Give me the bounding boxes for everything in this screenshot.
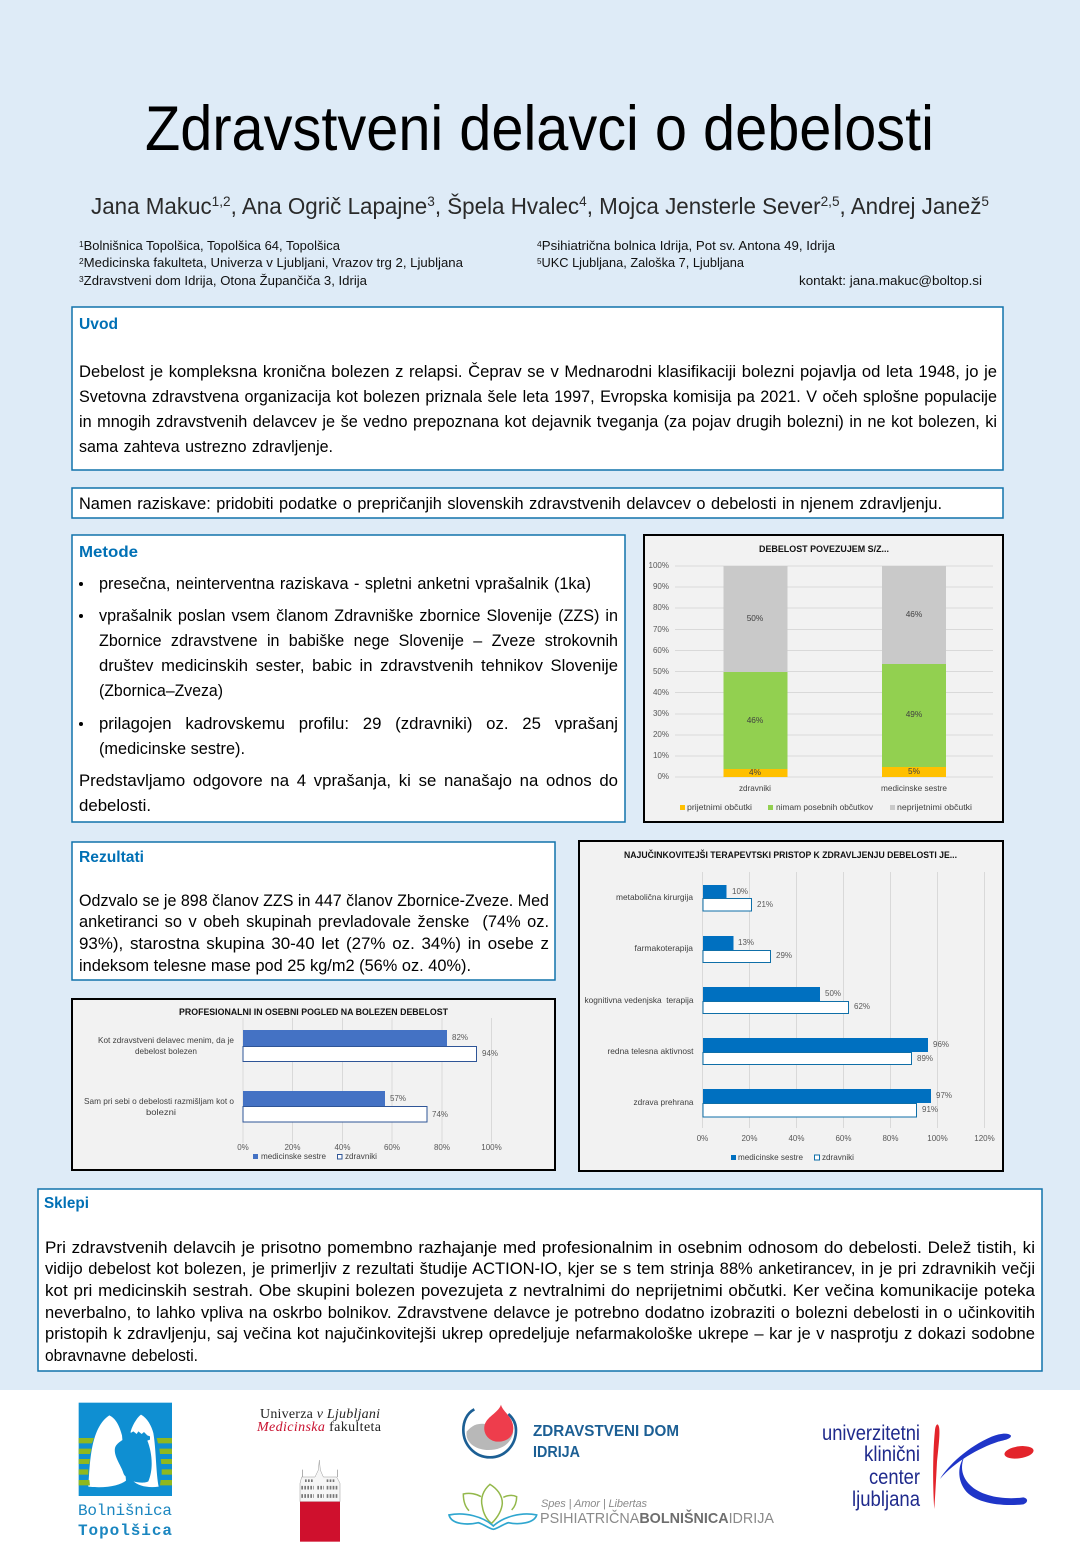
axis labels: 80% <box>882 1134 899 1143</box>
panel: Sklepi <box>38 1189 1042 1371</box>
logo: UKC Ljubljana: klinični <box>864 1443 920 1466</box>
axis labels: 120% <box>974 1134 995 1143</box>
text: Rezultati body: anketiranci so v obeh skupinah prevladovale ženske (74% oz. <box>79 913 549 931</box>
logo: Psihiatrična bolnišnica Idrija: Spes | Amor | Libertas <box>541 1498 648 1510</box>
bars: Kot zdravstveni delavec: 94% <box>482 1049 498 1058</box>
bars: farmakoterapija: farmakoterapija <box>634 943 693 953</box>
bars: metabolična kirurgija: metabolična kirurgija <box>616 892 693 902</box>
stacked bar: zdravniki: 4% <box>749 767 762 777</box>
bars: redna telesna aktivnost <box>608 1038 949 1064</box>
bars: Kot zdravstveni delavec: debelost bolezen <box>135 1046 197 1056</box>
text: Sklepi body: neverbalno, to lahko vpliva na oskrbo bolnikov. Zdravstvene delavce je potrebno dodatno izobraziti o bolezni debelosti in o učinkovitih <box>45 1304 1035 1322</box>
legend <box>680 802 972 812</box>
text: Sklepi body: pristopih k zdravljenju, saj večina kot najučinkovitejši ukrep opredeljuje nefarmakološke ukrepe – kar je v nasprotju z dokazi sodobne <box>45 1325 1035 1343</box>
logo: Zdravstveni dom Idrija: ZDRAVSTVENI DOM <box>533 1423 679 1440</box>
bars: redna telesna aktivnost: 89% <box>917 1054 933 1063</box>
affiliations: 2 <box>79 257 84 266</box>
axis labels: 0% <box>237 1143 249 1152</box>
axis labels: percent <box>649 561 669 781</box>
bars: Sam pri sebi: 74% <box>432 1110 448 1119</box>
axis labels: percent: 0% <box>657 772 669 781</box>
logo: Psihiatrična bolnišnica Idrija <box>449 1484 774 1529</box>
chart: Profesionalni in osebni pogled: PROFESIONALNI IN OSEBNI POGLED NA BOLEZEN DEBELOST <box>179 1007 448 1018</box>
axis labels: percent: 20% <box>653 730 669 739</box>
chart: Najučinkovitejši terapevtski pristop <box>579 841 1003 1171</box>
authors: 3 <box>427 193 435 209</box>
title: Zdravstveni delavci o debelosti <box>145 94 934 164</box>
affiliations: 1 <box>79 240 84 249</box>
bars: zdrava prehrana: zdrava prehrana <box>634 1097 694 1107</box>
bars: redna telesna aktivnost: redna telesna aktivnost <box>608 1046 694 1056</box>
bars: kognitivna vedenjska terapija: 62% <box>854 1002 870 1011</box>
axis labels: percent: 50% <box>653 667 669 676</box>
logo: Bolnišnica Topolšica: Topolšica <box>78 1522 172 1540</box>
legend: prijetnimi občutki <box>687 802 752 812</box>
heading: Rezultati: Rezultati <box>79 849 144 866</box>
logo: UKC Ljubljana: univerzitetni <box>822 1422 920 1445</box>
text: Rezultati body: Odzvalo se je 898 članov ZZS in 447 članov Zbornice-Zveze. Med <box>79 892 549 910</box>
authors: 1,2 <box>212 193 231 209</box>
logo: Univerza v Ljubljani: Medicinska fakulteta <box>256 1420 382 1435</box>
text: Rezultati body: indeksom telesne mase pod 25 kg/m2 (56% oz. 40%). <box>79 957 471 975</box>
axis labels <box>237 1143 502 1152</box>
authors: , Špela Hvalec <box>435 192 579 219</box>
text: Uvod body: Debelost je kompleksna kronična bolezen z relapsi. Čeprav se v Mednarodni klasifikaciji bolezni pojavlja od leta 1948, jo je <box>79 362 997 381</box>
legend: neprijetnimi občutki <box>897 802 972 812</box>
authors: 5 <box>981 193 989 209</box>
legend: nimam posebnih občutkov <box>776 802 874 812</box>
axis labels: percent: 60% <box>653 646 669 655</box>
axis labels <box>697 1134 995 1143</box>
list: Metode bullets <box>79 575 618 815</box>
affiliations: Bolnišnica Topolšica, Topolšica 64, Topolšica <box>84 239 340 253</box>
chart: Debelost povezujem s/z <box>644 535 1003 822</box>
bars: redna telesna aktivnost: 96% <box>933 1040 949 1049</box>
text: Uvod body: Svetovna zdravstvena organizacija kot bolezen priznala šele leta 1997, Evropska komisija pa 2021. V očeh splošne populacije <box>79 388 997 406</box>
axis labels: 100% <box>927 1134 948 1143</box>
list: Metode bullets: (Zbornica–Zveza) <box>99 682 223 700</box>
axis labels: 20% <box>741 1134 758 1143</box>
legend <box>731 1152 854 1162</box>
logo: Bolnišnica Topolšica: Bolnišnica <box>78 1502 172 1520</box>
affiliations: 3 <box>79 275 84 284</box>
logo: Zdravstveni dom Idrija: IDRIJA <box>533 1444 580 1461</box>
panel: Metode <box>72 535 625 822</box>
logo: UKC Ljubljana <box>822 1422 1034 1511</box>
bars: Kot zdravstveni delavec: Kot zdravstveni delavec menim, da je <box>98 1035 234 1045</box>
legend <box>253 1151 377 1161</box>
list: Metode bullets: presečna, neinterventna raziskava - spletni anketni vprašalnik (1ka) <box>99 575 591 593</box>
list: Metode bullets: prilagojen kadrovskemu profilu: 29 (zdravniki) oz. 25 vprašanj <box>99 715 618 733</box>
axis labels: 60% <box>384 1143 400 1152</box>
text: Rezultati body <box>79 892 549 975</box>
bars: Kot zdravstveni delavec <box>98 1030 498 1062</box>
panel: Namen raziskave <box>72 488 1003 518</box>
affiliations: Psihiatrična bolnica Idrija, Pot sv. Antona 49, Idrija <box>542 239 835 253</box>
bars: metabolična kirurgija <box>616 885 773 911</box>
authors: 4 <box>579 193 587 209</box>
heading: Metode: Metode <box>79 544 138 561</box>
chart: Debelost povezujem s/z: zdravniki <box>739 783 771 793</box>
bars: kognitivna vedenjska terapija: 50% <box>825 989 841 998</box>
stacked bar: medicinske sestre: 49% <box>906 709 923 719</box>
list: Metode bullets: debelosti. <box>79 797 151 815</box>
heading: Uvod: Uvod <box>79 316 118 333</box>
bars: Sam pri sebi: Sam pri sebi o debelosti razmišljam kot o <box>84 1096 234 1106</box>
stacked bar: medicinske sestre: 46% <box>906 609 923 619</box>
axis labels: percent: 30% <box>653 709 669 718</box>
bars: Kot zdravstveni delavec: 82% <box>452 1033 468 1042</box>
list: Metode bullets: društev medicinskih sester, babic in zdravstvenih tehnikov Slovenije <box>99 657 618 675</box>
bars: Sam pri sebi <box>84 1091 448 1122</box>
axis labels: 20% <box>284 1143 301 1152</box>
text: Uvod body: sama zahteva ustrezno zdravljenje. <box>79 438 333 456</box>
logo: Zdravstveni dom Idrija <box>463 1405 679 1461</box>
text: Uvod body <box>79 362 997 456</box>
list: Metode bullets: vprašalnik poslan vsem članom Zdravniške zbornice Slovenije (ZZS) in <box>99 607 618 625</box>
text: Sklepi body: vidijo debelost kot bolezen, je primerljiv z rezultati študije ACTION-IO, kjer se s tem strinja 88% anketirancev, in je pri zdravnikih večji <box>45 1260 1035 1278</box>
chart: Debelost povezujem s/z: DEBELOST POVEZUJEM S/Z... <box>759 544 889 555</box>
text: Uvod body: in mnogih zdravstvenih delavcev je še vedno prepoznana kot dejavnik tveganja (za pojav drugih bolezni) in ne kot bolezen, ki <box>79 413 997 431</box>
logo: UKC Ljubljana: ljubljana <box>852 1488 920 1511</box>
chart: Debelost povezujem s/z: medicinske sestre <box>881 783 947 793</box>
affiliations: 4 <box>537 240 542 249</box>
list: Metode bullets: Predstavljamo odgovore na 4 vprašanja, ki se nanašajo na odnos do <box>79 772 618 790</box>
authors: , Ana Ogrič Lapajne <box>231 193 427 219</box>
affiliations: UKC Ljubljana, Zaloška 7, Ljubljana <box>542 256 744 270</box>
bars: zdrava prehrana: 91% <box>922 1105 938 1114</box>
axis labels: percent: 80% <box>653 603 669 612</box>
authors: , Mojca Jensterle Sever <box>587 193 821 219</box>
axis labels: percent: 100% <box>649 561 669 570</box>
bars: Sam pri sebi: bolezni <box>146 1107 176 1117</box>
legend: zdravniki <box>822 1152 854 1162</box>
text: Sklepi body <box>45 1239 1036 1365</box>
axis labels: percent: 90% <box>653 582 669 591</box>
bars: metabolična kirurgija: 21% <box>757 900 773 909</box>
bars: farmakoterapija: 29% <box>776 951 792 960</box>
logo: Univerza v Ljubljani <box>256 1407 382 1542</box>
axis labels: 40% <box>334 1143 351 1152</box>
stacked bar: zdravniki <box>724 566 788 777</box>
axis labels: 40% <box>788 1134 805 1143</box>
list: Metode bullets: (medicinske sestre). <box>99 740 245 758</box>
stacked bar: zdravniki: 50% <box>747 613 764 623</box>
list: Metode bullets: Zbornice zdravstvene in babiške nege Slovenije – Zveze strokovnih <box>99 632 618 650</box>
authors: 2,5 <box>821 193 840 209</box>
affiliations: Zdravstveni dom Idrija, Otona Župančiča 3, Idrija <box>84 273 367 288</box>
bars: farmakoterapija <box>634 936 792 962</box>
axis labels: 80% <box>434 1143 450 1152</box>
text: Sklepi body: obravnavne debelosti. <box>45 1347 198 1365</box>
logo: Bolnišnica Topolšica <box>78 1403 172 1540</box>
stacked bar: zdravniki: 46% <box>747 715 764 725</box>
authors: Jana Makuc <box>91 193 215 219</box>
affiliations: kontakt: jana.makuc@boltop.si <box>799 274 982 288</box>
bars: metabolična kirurgija: 10% <box>732 887 748 896</box>
bars: Sam pri sebi: 57% <box>390 1094 406 1103</box>
axis labels: 60% <box>835 1134 852 1143</box>
panel: Namen raziskave: Namen raziskave: pridobiti podatke o prepričanjih slovenskih zdravstvenih delavcev o debelosti in njenem zdravljenju. <box>79 495 942 513</box>
legend: medicinske sestre <box>738 1152 803 1162</box>
chart: Najučinkovitejši terapevtski pristop: NAJUČINKOVITEJŠI TERAPEVTSKI PRISTOP K ZDRAVLJENJU DEBELOSTI JE... <box>624 849 957 861</box>
logo: Univerza v Ljubljani: Univerza v Ljubljani <box>260 1407 380 1422</box>
text: Sklepi body: Pri zdravstvenih delavcih je prisotno pomembno razhajanje med profesionalnim in osebnim odnosom do debelosti. Delež tistih, ki <box>45 1239 1035 1257</box>
axis labels: 0% <box>697 1134 708 1143</box>
affiliations <box>79 239 982 288</box>
panel: Uvod <box>72 307 1003 470</box>
bars: zdrava prehrana: 97% <box>936 1091 952 1100</box>
bars: zdrava prehrana <box>634 1089 952 1117</box>
authors: , Andrej Janež <box>840 193 981 219</box>
axis labels: percent: 40% <box>653 688 669 697</box>
stacked bar: medicinske sestre: 5% <box>908 766 921 776</box>
affiliations: 5 <box>537 257 542 266</box>
affiliations: Medicinska fakulteta, Univerza v Ljubljani, Vrazov trg 2, Ljubljana <box>84 256 463 270</box>
chart: Profesionalni in osebni pogled <box>72 999 555 1170</box>
logo: Psihiatrična bolnišnica Idrija: PSIHIATRIČNABOLNIŠNICAIDRIJA <box>540 1509 774 1527</box>
legend: zdravniki <box>345 1151 377 1161</box>
axis labels: 100% <box>481 1143 502 1152</box>
bars: farmakoterapija: 13% <box>738 938 754 947</box>
legend: medicinske sestre <box>261 1151 326 1161</box>
text: Sklepi body: kot pri medicinskih sestrah. Obe skupini bolezen povezujeta z nevtralnimi do neprijetnimi občutki. Ker večina komunikacije poteka <box>45 1282 1036 1300</box>
stacked bar: medicinske sestre <box>882 566 946 777</box>
axis labels: percent: 70% <box>653 625 669 634</box>
text: Rezultati body: 93%), starostna skupina 30-40 let (27% oz. 34%) in osebe z <box>79 935 549 953</box>
icon: castle <box>300 1460 340 1542</box>
bars: kognitivna vedenjska terapija: kognitivna vedenjska terapija <box>584 995 694 1005</box>
logo: UKC Ljubljana: center <box>869 1466 920 1489</box>
heading: Sklepi: Sklepi <box>44 1195 89 1212</box>
bars: kognitivna vedenjska terapija <box>584 987 870 1014</box>
panel: Rezultati <box>72 842 555 980</box>
axis labels: percent: 10% <box>653 751 669 760</box>
